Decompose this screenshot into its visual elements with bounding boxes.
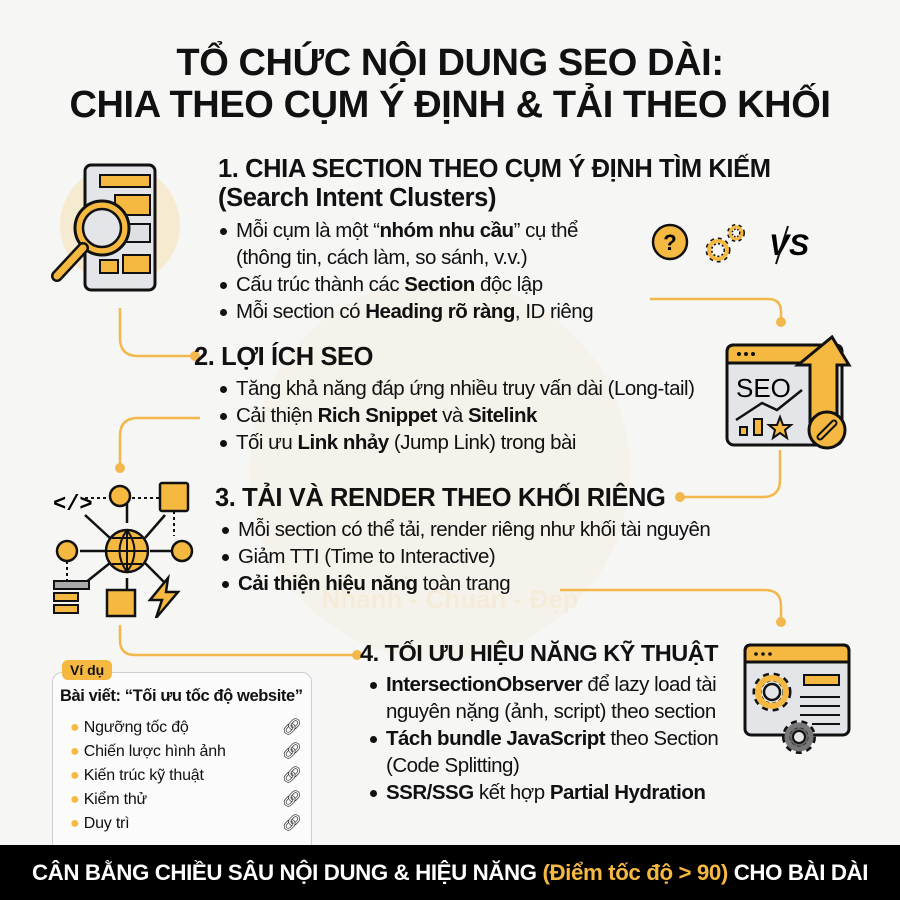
section 4: 4. TỐI ƯU HIỆU NĂNG KỸ THUẬT [360, 640, 718, 666]
label: ví dụ: Ví dụ [70, 662, 104, 678]
icon: settings window [744, 644, 850, 754]
footer bar [0, 845, 900, 900]
title: CHIA THEO CỤM Ý ĐỊNH & TẢI THEO KHỐI [69, 84, 831, 126]
title: TỔ CHỨC NỘI DUNG SEO DÀI: [176, 42, 724, 84]
example box [52, 660, 312, 845]
section 2: Tối ưu Link nhảy (Jump Link) trong bài [236, 431, 576, 454]
example box: 🔗︎ [282, 767, 302, 784]
section 2: Cải thiện Rich Snippet và Sitelink [236, 404, 537, 427]
section 1: Cấu trúc thành các Section độc lập [236, 273, 543, 296]
watermark logo: Nhanh - Chuẩn - Đẹp [321, 584, 579, 614]
section 4: SSR/SSG kết hợp Partial Hydration [386, 781, 705, 804]
section 1: 1. CHIA SECTION THEO CỤM Ý ĐỊNH TÌM KIẾM [218, 155, 771, 183]
icons: question, gears, vs: ? [663, 230, 677, 255]
section 3: 3. TẢI VÀ RENDER THEO KHỐI RIÊNG [215, 484, 666, 512]
example box: ● Chiến lược hình ảnh [70, 743, 226, 760]
icon: SEO chart: SEO [736, 373, 791, 403]
section 2: 2. LỢI ÍCH SEO [194, 343, 373, 371]
section 2 [194, 342, 694, 454]
example box: Bài viết: “Tối ưu tốc độ website” [60, 687, 303, 705]
section 2: Tăng khả năng đáp ứng nhiều truy vấn dài (Long-tail) [236, 377, 694, 400]
section 4: nguyên nặng (ảnh, script) theo section [386, 700, 716, 723]
example box: 🔗︎ [282, 815, 302, 832]
section 3: Mỗi section có thể tải, render riêng như khối tài nguyên [238, 518, 710, 541]
icon: SEO chart [726, 335, 852, 450]
section 4 [360, 640, 718, 804]
section 1: (Search Intent Clusters) [218, 184, 496, 212]
icon: network globe [53, 482, 194, 618]
section 3: Giảm TTI (Time to Interactive) [238, 545, 495, 568]
section 3 [215, 482, 710, 595]
section 1: Mỗi cụm là một “nhóm nhu cầu” cụ thể [236, 219, 578, 242]
section 4: Tách bundle JavaScript theo Section [386, 727, 718, 750]
example box: ● Kiến trúc kỹ thuật [70, 767, 204, 784]
section 1: (thông tin, cách làm, so sánh, v.v.) [236, 246, 527, 269]
title [69, 41, 831, 126]
example box: ● Kiểm thử [70, 791, 147, 808]
section 1: Mỗi section có Heading rõ ràng, ID riêng [236, 300, 593, 323]
section 4: (Code Splitting) [386, 754, 519, 777]
icons: question, gears, vs [652, 224, 809, 264]
section 1 [218, 154, 771, 323]
footer bar: CÂN BẰNG CHIỀU SÂU NỘI DUNG & HIỆU NĂNG (Điểm tốc độ > 90) CHO BÀI DÀI [32, 860, 868, 885]
section 4: IntersectionObserver để lazy load tài [386, 673, 716, 696]
icon: document search [51, 164, 156, 292]
example box: 🔗︎ [282, 719, 302, 736]
example box: 🔗︎ [282, 791, 302, 808]
label: ví dụ [62, 660, 112, 680]
example box: ● Duy trì [70, 815, 129, 832]
icons: question, gears, vs: VS [769, 229, 809, 262]
example box: 🔗︎ [282, 743, 302, 760]
example box: ● Ngưỡng tốc độ [70, 719, 189, 736]
section 3: Cải thiện hiệu năng toàn trang [238, 572, 510, 595]
icon: network globe: </> [53, 492, 93, 517]
